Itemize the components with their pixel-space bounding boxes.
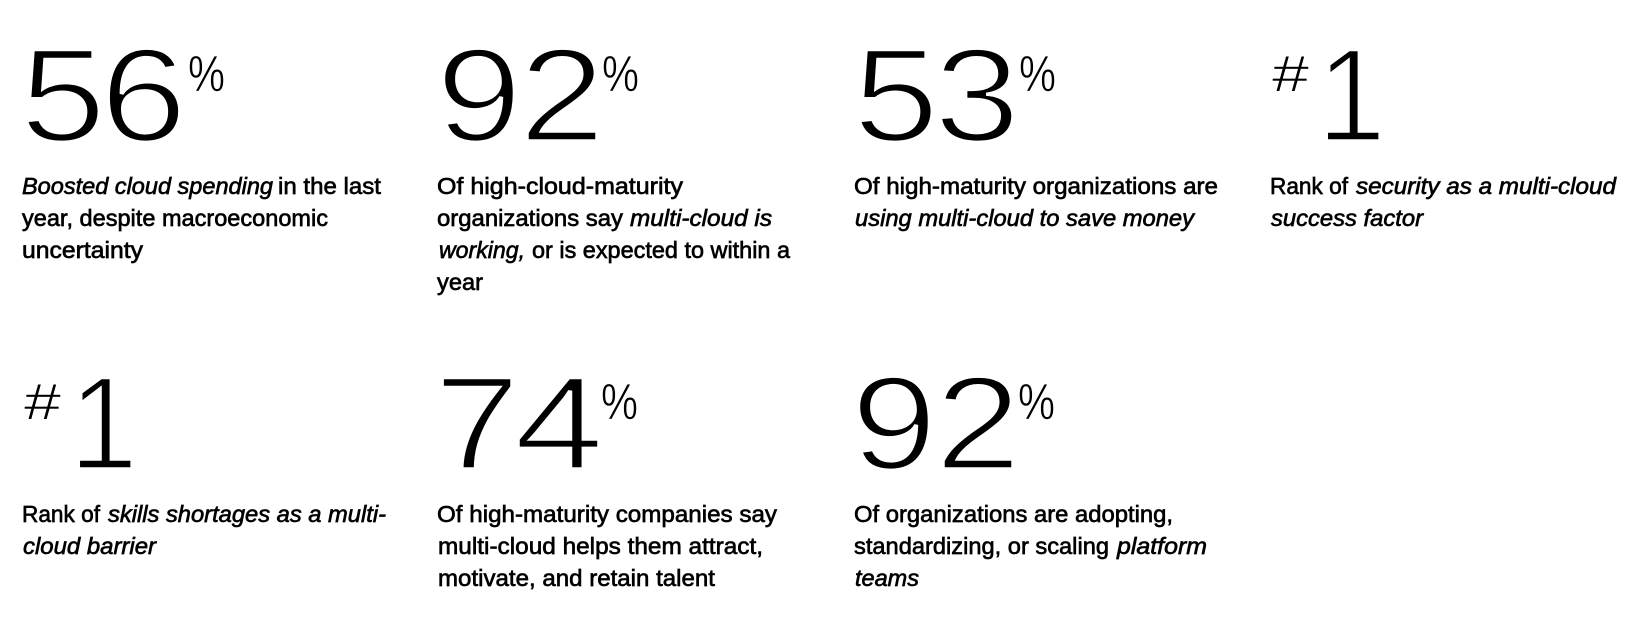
description: multi-cloud is working: multi-cloud is: [630, 205, 773, 231]
big number: #1: 1: [1317, 22, 1386, 170]
big number: 92%: [851, 350, 1055, 498]
big number: 74%: 4: [514, 350, 604, 498]
description: using multi-cloud to save money: [854, 173, 1218, 231]
description: platform teams: teams: [855, 565, 920, 591]
description: attract, motivate and retain talent: multi-cloud helps them attract,: [438, 533, 763, 559]
description: multi-cloud is working: [437, 173, 790, 295]
big number: #1: [1272, 22, 1386, 170]
big number: 92%: %: [602, 45, 639, 102]
big number: 56%: [20, 22, 225, 170]
big number: #1: #: [24, 373, 62, 430]
description: boosted cloud spending: uncertainty: [22, 237, 144, 263]
description: attract, motivate and retain talent: [437, 501, 778, 591]
big number: 53%: 5: [853, 22, 939, 170]
description: multi-cloud is working: organizations say: [437, 205, 624, 231]
description: multi-cloud is working: or is expected to within a: [532, 237, 790, 263]
stat card: #1 skills shortages: [22, 350, 386, 559]
description: multi-cloud is working: year: [437, 269, 483, 295]
big number: 74%: [434, 350, 638, 498]
description: multi-cloud is working: Of high-cloud-maturity: [437, 173, 684, 199]
description: boosted cloud spending: [22, 173, 382, 263]
description: using multi-cloud to save money: using multi-cloud to save money: [855, 205, 1196, 231]
description: boosted cloud spending: Boosted cloud spending: [22, 173, 273, 199]
description: platform teams: standardizing, or scaling: [854, 533, 1109, 559]
big number: #1: 1: [69, 350, 138, 498]
big number: 56%: 6: [100, 22, 187, 170]
description: security as a success factor: [1270, 173, 1617, 231]
big number: 74%: 7: [434, 350, 520, 498]
big number: 56%: %: [188, 45, 225, 102]
stat card: 56% boosted cloud spending: [20, 22, 382, 263]
stat card: 74% talent: [434, 350, 778, 591]
description: skills shortages as a barrier: [22, 501, 386, 559]
description: security as a success factor: Rank of: [1270, 173, 1349, 199]
description: multi-cloud is working: working,: [439, 237, 525, 263]
big number: 53%: [853, 22, 1056, 170]
big number: 74%: %: [601, 373, 638, 430]
description: skills shortages as a barrier: skills shortages as a multi-: [108, 501, 386, 527]
description: security as a success factor: success factor: [1271, 205, 1424, 231]
description: boosted cloud spending: in the last: [278, 173, 382, 199]
big number: 56%: 5: [20, 22, 106, 170]
description: security as a success factor: security as a multi-cloud: [1356, 173, 1617, 199]
description: skills shortages as a barrier: cloud barrier: [23, 533, 157, 559]
stat card: 53% save money: [853, 22, 1218, 231]
big number: 53%: %: [1019, 45, 1056, 102]
description: attract, motivate and retain talent: Of high-maturity companies say: [437, 501, 778, 527]
big number: 92%: [436, 22, 639, 170]
big number: #1: #: [1272, 45, 1310, 102]
description: platform teams: Of organizations are adopting,: [854, 501, 1173, 527]
description: platform teams: platform: [1116, 533, 1207, 559]
stat card: #1 security: [1270, 22, 1617, 231]
big number: 92%: 9: [851, 350, 937, 498]
big number: 92%: 2: [519, 22, 605, 170]
big number: 53%: 3: [934, 22, 1020, 170]
description: attract, motivate and retain talent: motivate, and retain talent: [438, 565, 716, 591]
stat card: 92% multi-cloud is working: [436, 22, 790, 295]
big number: 92%: 9: [436, 22, 522, 170]
description: using multi-cloud to save money: Of high-maturity organizations are: [854, 173, 1218, 199]
big number: 92%: %: [1018, 373, 1055, 430]
description: boosted cloud spending: year, despite macroeconomic: [22, 205, 328, 231]
description: platform teams: [854, 501, 1207, 591]
big number: #1: [24, 350, 138, 498]
stat card: 92% platform teams: [851, 350, 1207, 591]
description: skills shortages as a barrier: Rank of: [22, 501, 101, 527]
big number: 92%: 2: [935, 350, 1021, 498]
